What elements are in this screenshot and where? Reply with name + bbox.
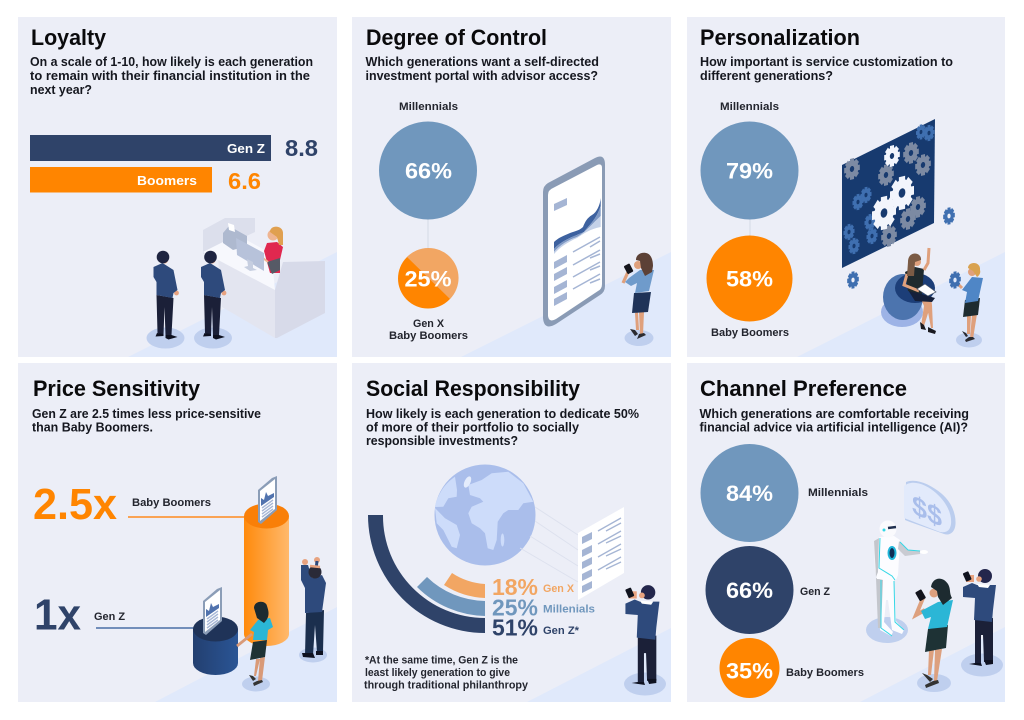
heading: Price Sensitivity: Price Sensitivity (33, 376, 200, 401)
question text (30, 55, 313, 97)
panel: Channel Preference (687, 363, 1005, 702)
footnote: *At the same time, Gen Z is the (365, 654, 518, 666)
question text: of more of their portfolio to socially (366, 420, 579, 434)
circle: Millennials 66%: 66% (405, 158, 452, 184)
label: Baby Boomers: Baby Boomers (711, 327, 789, 339)
bar chart: loyalty scores: 6.6 (228, 168, 261, 194)
figure: robot (866, 520, 928, 643)
circle: Baby Boomers 58% (706, 236, 792, 322)
legend: Gen Z 51% (492, 614, 580, 640)
stat: 2.5x Baby Boomers: Baby Boomers (132, 497, 211, 509)
label: Gen Z: Gen Z (800, 586, 830, 598)
heading: Loyalty: Loyalty (31, 25, 106, 50)
figure: customer 1 (146, 251, 184, 348)
footnote: least likely generation to give (365, 667, 510, 679)
question text: investment portal with advisor access? (366, 69, 598, 83)
icon: phone on orange cylinder (258, 476, 277, 524)
figure: woman on bean bag (881, 248, 936, 334)
legend: Gen X 18%: Gen X (543, 583, 575, 595)
panel: Social Responsibility (352, 363, 671, 702)
legend: Gen Z 51%: Gen Z* (543, 625, 580, 637)
stat: 1x Gen Z: 1x (34, 590, 81, 640)
figure: woman with phone (623, 253, 654, 346)
figure: woman at cylinder (237, 602, 273, 692)
panel: Loyalty (18, 17, 337, 357)
bar chart: loyalty scores: Gen Z (227, 141, 265, 156)
receptionist (263, 227, 283, 274)
question text: financial advice via artificial intelligence (AI)? (700, 420, 968, 434)
bar chart: loyalty scores: Boomers (137, 173, 197, 188)
circle: Baby Boomers 58%: 58% (726, 266, 773, 292)
question text: How important is service customization to (700, 55, 953, 69)
label: Millennials: Millennials (720, 101, 779, 113)
bar chart: loyalty scores (30, 135, 318, 194)
question text (700, 407, 969, 434)
label: Gen X, Baby Boomers: Baby Boomers (389, 330, 468, 342)
circle: Baby Boomers 35% (720, 638, 780, 698)
label: Millennials: Millennials (399, 101, 458, 113)
circle: Gen Z 66%: 66% (726, 578, 773, 603)
icon: speech bubble with dollars (904, 481, 956, 535)
label: Gen X, Baby Boomers: Gen X (413, 318, 445, 330)
stat: 2.5x Baby Boomers (33, 480, 246, 529)
question text: different generations? (700, 69, 833, 83)
chart: nested arcs (368, 515, 485, 633)
circle: Millennials 84%: 84% (726, 481, 773, 506)
illustration: gear screen (842, 119, 935, 268)
legend: Gen X 18%: 18% (492, 574, 538, 600)
icon: floating gear left (847, 270, 859, 290)
illustration: large phone with chart (543, 157, 605, 326)
heading: Channel Preference: Channel Preference (700, 376, 907, 401)
figure: woman with phone (915, 579, 953, 692)
legend: Millenials 25% (492, 594, 595, 620)
circle: Millennials 79% (700, 122, 798, 220)
figure: man photographing (624, 585, 666, 696)
legend: Millenials 25%: Millenials (543, 604, 595, 616)
question text (700, 55, 953, 83)
panel: Personalization (687, 17, 1005, 357)
label: Millennials: Millennials (808, 487, 868, 499)
figure: customer 2 (194, 251, 232, 348)
footnote (364, 654, 529, 692)
illustration: report sheet (578, 507, 624, 600)
circle: Millennials 84% (700, 444, 798, 542)
circle: Millennials 66% (379, 122, 477, 220)
footnote: through traditional philanthropy (364, 680, 529, 692)
question text: to remain with their financial institution in the (30, 69, 310, 83)
stat: 2.5x Baby Boomers: 2.5x (33, 480, 118, 529)
description text: than Baby Boomers. (32, 420, 153, 434)
icon: phone on navy cylinder (203, 587, 222, 635)
figure: man with arms raised (299, 557, 327, 662)
figure: man with phone (961, 569, 1003, 676)
circle: Gen Z 66% (706, 546, 794, 634)
legend: Gen Z 51%: 51% (492, 614, 538, 640)
heading: Personalization: Personalization (700, 25, 860, 50)
stat: 1x Gen Z (34, 590, 194, 640)
chart: orange cylinder (244, 504, 289, 646)
description text (32, 407, 261, 434)
question text: next year? (30, 83, 92, 97)
bar chart: loyalty scores: 8.8 (285, 135, 318, 161)
panel: Degree of Control (352, 17, 671, 357)
question text (366, 407, 639, 448)
stat: 1x Gen Z: Gen Z (94, 611, 125, 623)
question text: On a scale of 1-10, how likely is each generation (30, 55, 313, 69)
circle: Gen X and Baby Boomers 25%: 25% (404, 266, 452, 292)
label: Baby Boomers: Baby Boomers (786, 667, 864, 679)
chart: navy cylinder (193, 616, 238, 675)
label: Gen X, Baby Boomers (389, 318, 468, 342)
illustration: bank teller desk (203, 218, 325, 338)
heading: Social Responsibility: Social Responsibility (366, 376, 580, 401)
question text: responsible investments? (366, 434, 518, 448)
figure: woman holding gear (949, 263, 983, 348)
circle: Gen X and Baby Boomers 25% (398, 248, 459, 308)
legend: Gen X 18% (492, 574, 575, 600)
question text: Which generations want a self-directed (366, 55, 599, 69)
circle: Baby Boomers 35%: 35% (726, 658, 773, 684)
circle: Millennials 79%: 79% (726, 158, 773, 184)
panel: Price Sensitivity (18, 363, 337, 702)
illustration: globe (434, 464, 536, 566)
description text: Gen Z are 2.5 times less price-sensitive (32, 407, 261, 421)
heading: Degree of Control: Degree of Control (366, 25, 547, 50)
question text: How likely is each generation to dedicate 50% (366, 407, 639, 421)
question text (366, 55, 599, 83)
legend: Millenials 25%: 25% (492, 594, 538, 620)
icon: speech bubble with dollars: $$ (912, 489, 942, 534)
question text: Which generations are comfortable receiving (700, 407, 969, 421)
icon: floating gear right (943, 206, 955, 226)
